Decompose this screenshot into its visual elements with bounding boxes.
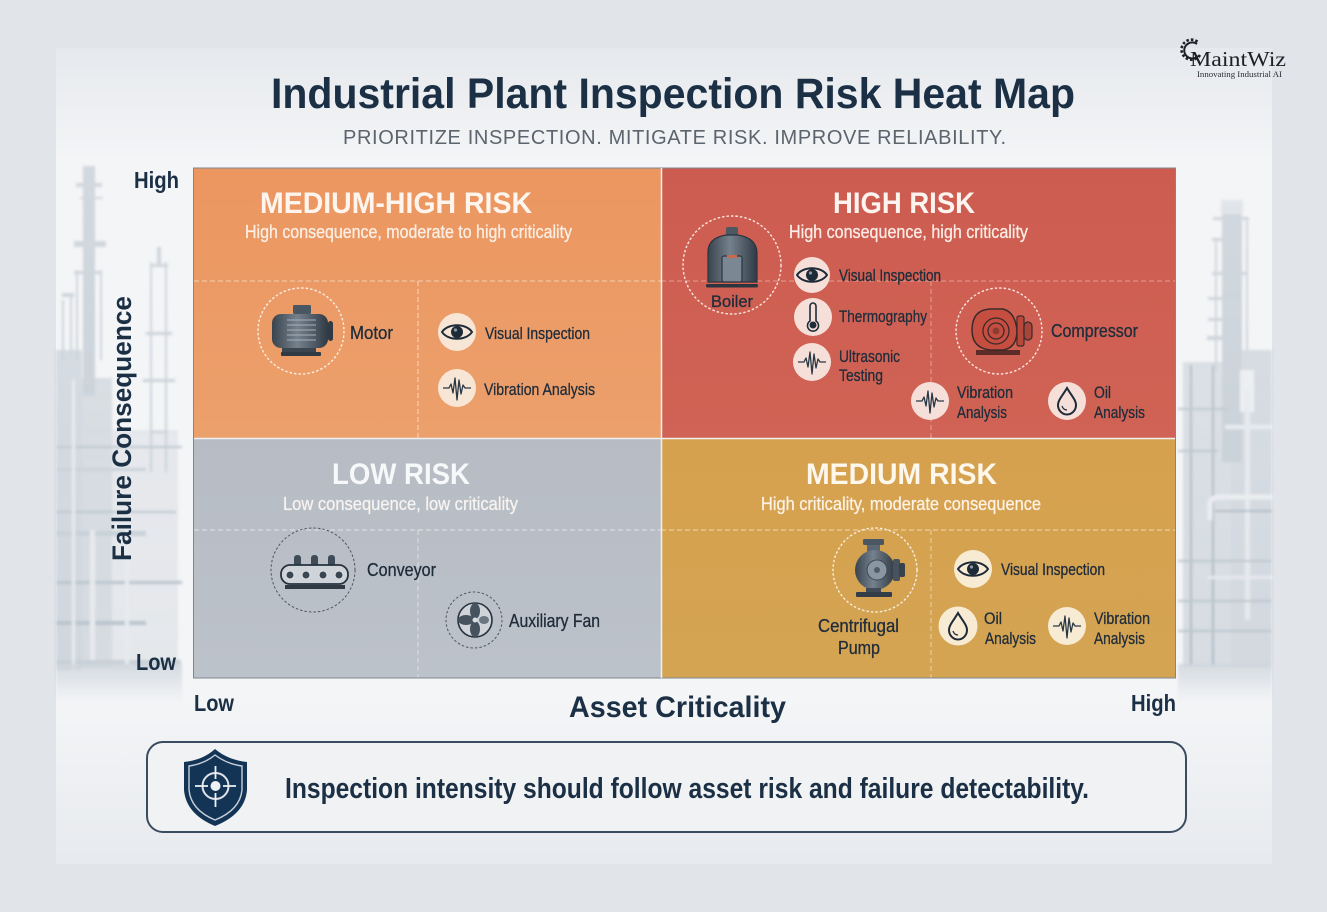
method: oil analysis xyxy=(1048,382,1145,422)
label: centrifugal pump: Centrifugal xyxy=(818,616,899,636)
label: centrifugal pump: Pump xyxy=(838,638,880,658)
method: vibration analysis xyxy=(911,382,1013,422)
method: vibration analysis: Vibration Analysis xyxy=(484,380,595,399)
method: vibration analysis: Analysis xyxy=(957,403,1007,422)
method: visual inspection xyxy=(954,550,1105,588)
method: visual inspection: Visual Inspection xyxy=(1001,560,1105,579)
logo wordmark: MaintWiz xyxy=(1190,47,1286,71)
method: vibration analysis: Vibration xyxy=(957,383,1013,402)
icon: boiler xyxy=(683,216,781,314)
method: oil analysis: Analysis xyxy=(1094,403,1145,422)
panel: medium risk xyxy=(661,438,1175,678)
logo gear xyxy=(1182,40,1200,60)
heading: low risk: LOW RISK xyxy=(332,458,470,491)
background refinery: left xyxy=(56,166,182,704)
label: boiler: Boiler xyxy=(711,292,753,311)
method: visual inspection xyxy=(794,257,941,293)
method: vibration analysis xyxy=(438,369,595,407)
method: vibration analysis xyxy=(1048,607,1150,648)
y axis labels xyxy=(107,167,179,675)
method: vibration analysis: Analysis xyxy=(1094,629,1145,648)
background refinery: right xyxy=(1178,200,1272,704)
icon: motor xyxy=(258,288,344,374)
callout text: Inspection intensity should follow asset risk and failure detectability. xyxy=(285,773,1089,805)
logo tagline: Innovating Industrial AI xyxy=(1197,70,1282,79)
description: high risk: High consequence, high criticality xyxy=(789,222,1028,242)
method: vibration analysis: Vibration xyxy=(1094,609,1150,628)
x axis title: Asset Criticality xyxy=(569,691,786,724)
subtitle: PRIORITIZE INSPECTION. MITIGATE RISK. IMPROVE RELIABILITY. xyxy=(343,127,1006,149)
method: oil analysis xyxy=(938,606,1036,648)
icon: auxiliary fan xyxy=(446,592,502,648)
x axis low: Low xyxy=(194,690,234,716)
y axis high: High xyxy=(134,167,179,193)
panel: low risk xyxy=(194,438,661,678)
callout xyxy=(147,742,1186,832)
heading: high risk: HIGH RISK xyxy=(833,187,975,220)
label: compressor: Compressor xyxy=(1051,321,1138,341)
method: oil analysis: Oil xyxy=(984,609,1002,628)
description: medium risk: High criticality, moderate consequence xyxy=(761,494,1041,514)
label: auxiliary fan: Auxiliary Fan xyxy=(509,611,600,631)
method: visual inspection xyxy=(438,313,590,351)
y axis low: Low xyxy=(136,649,176,675)
panel: high risk xyxy=(661,168,1175,438)
method: thermography xyxy=(794,298,927,336)
method: thermography: Thermography xyxy=(839,307,927,326)
description: low risk: Low consequence, low criticality xyxy=(283,494,518,514)
title: Industrial Plant Inspection Risk Heat Map xyxy=(271,70,1075,118)
x axis labels xyxy=(194,690,1176,724)
method: ultrasonic testing: Testing xyxy=(839,366,883,385)
label: centrifugal pump xyxy=(818,616,899,658)
method: ultrasonic testing: Ultrasonic xyxy=(839,347,900,366)
method: visual inspection: Visual Inspection xyxy=(485,324,590,343)
icon: conveyor xyxy=(271,528,355,612)
heading: medium-high risk: MEDIUM-HIGH RISK xyxy=(260,187,532,220)
icon: shield with target xyxy=(184,749,247,826)
icon: compressor xyxy=(956,288,1042,374)
panel: medium-high risk xyxy=(194,168,661,438)
description: medium-high risk: High consequence, moderate to high criticality xyxy=(245,222,572,242)
label: motor: Motor xyxy=(350,323,393,343)
icon: centrifugal pump xyxy=(833,528,917,612)
heading: medium risk: MEDIUM RISK xyxy=(806,458,997,491)
label: conveyor: Conveyor xyxy=(367,560,436,580)
method: visual inspection: Visual Inspection xyxy=(839,266,941,285)
method: oil analysis: Analysis xyxy=(985,629,1036,648)
method: ultrasonic testing xyxy=(793,343,900,385)
y axis title: Failure Consequence xyxy=(107,296,137,561)
logo xyxy=(1182,40,1286,79)
x axis high: High xyxy=(1131,690,1176,716)
heat map frame xyxy=(194,168,1176,678)
icon: thermometer xyxy=(808,303,819,331)
method: oil analysis: Oil xyxy=(1094,383,1111,402)
